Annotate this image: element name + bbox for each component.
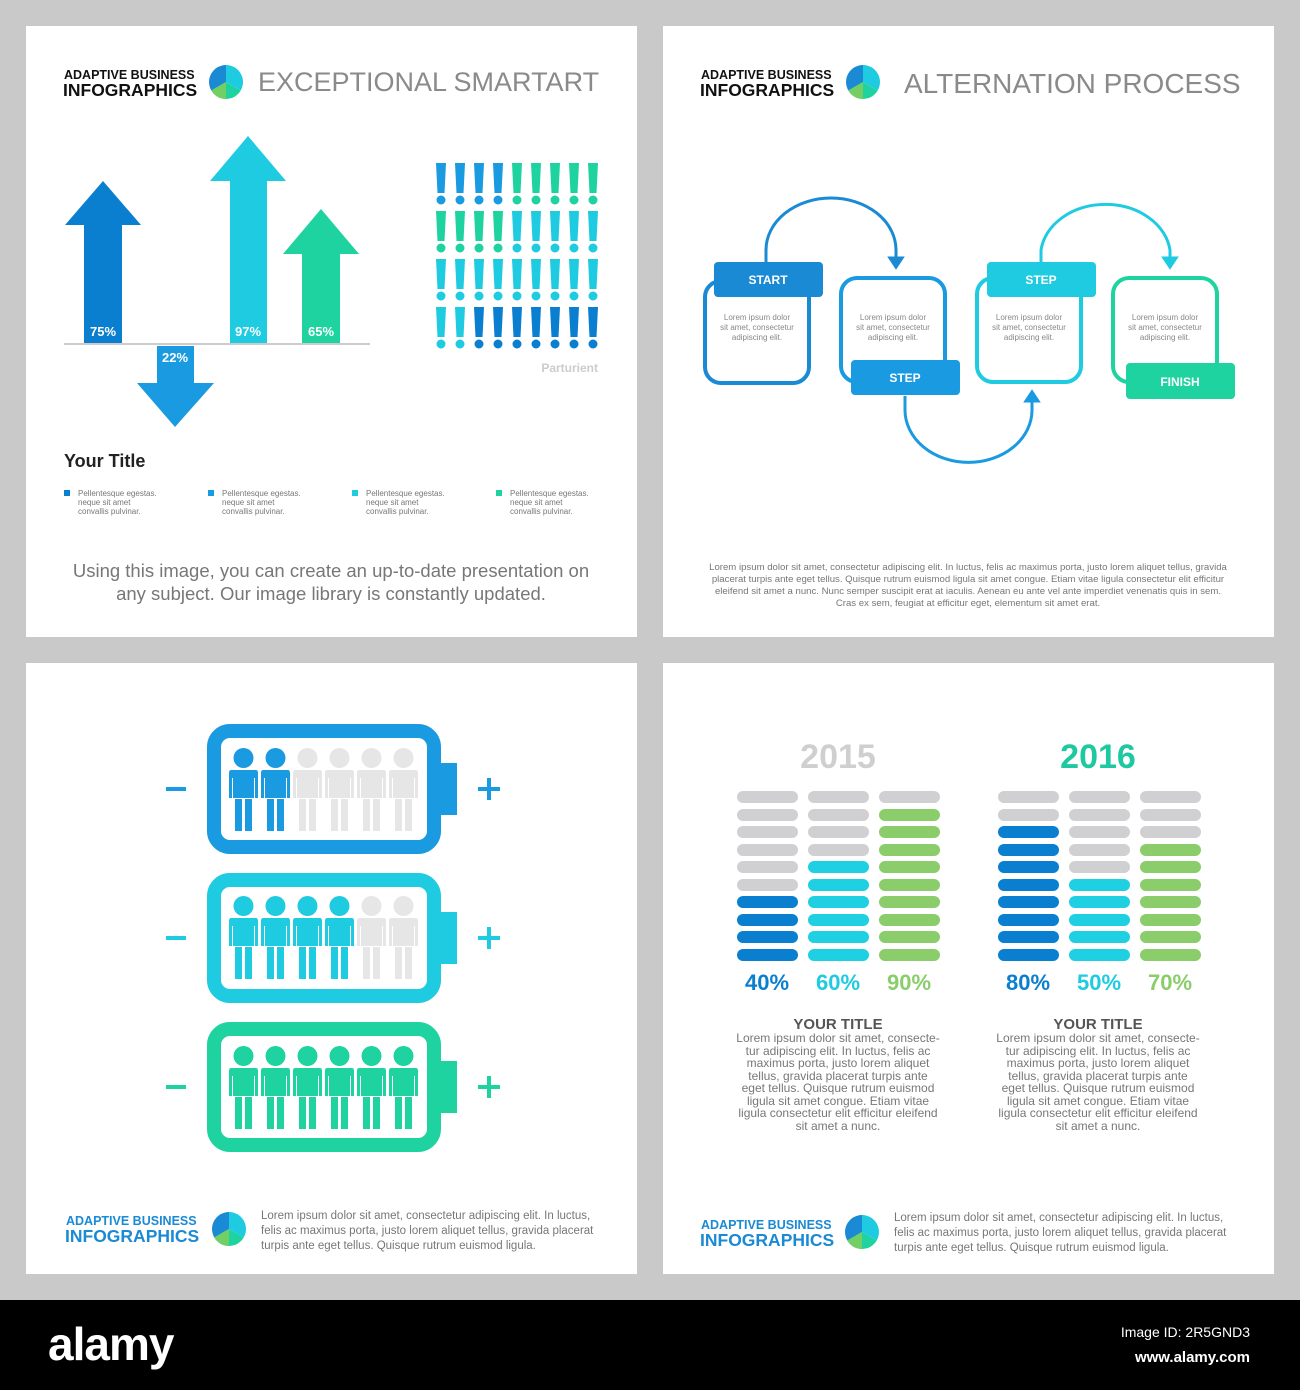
legend items: neque sit amet xyxy=(222,498,275,507)
step texts: adipiscing elit. xyxy=(1004,333,1054,342)
arcs xyxy=(766,198,1176,462)
exclamation grid xyxy=(436,163,598,348)
percentages xyxy=(745,970,1192,995)
text block 2015: ligula sit amet congue. Etiam vitae xyxy=(747,1094,929,1108)
step texts xyxy=(720,313,1202,342)
arrow 97% xyxy=(210,136,286,343)
paragraph xyxy=(709,562,1228,609)
percentages: 40% xyxy=(745,970,789,995)
step labels xyxy=(714,262,1235,399)
text block 2016: tellus, gravida placerat turpis ante xyxy=(1008,1069,1188,1083)
header logo xyxy=(700,65,880,100)
footer text xyxy=(73,560,589,604)
header logo: ADAPTIVE BUSINESS xyxy=(701,68,832,82)
title: EXCEPTIONAL SMARTART xyxy=(258,67,599,97)
paragraph: eleifend sit amet a nunc. Nunc semper suscipit erat at iaculis. Aenean eu ante vel ante imperdiet venenatis quis in sem. xyxy=(715,586,1221,597)
text block 2015: Lorem ipsum dolor sit amet, consecte- xyxy=(736,1031,940,1045)
legend items: neque sit amet xyxy=(510,498,563,507)
percentages: 70% xyxy=(1148,970,1192,995)
footer text: Lorem ipsum dolor sit amet, consectetur adipiscing elit. In luctus, xyxy=(261,1210,590,1222)
watermark bar: Image ID: 2R5GND3 xyxy=(1121,1324,1250,1340)
text block 2015 xyxy=(736,1016,940,1133)
footer logo: ADAPTIVE BUSINESS xyxy=(701,1218,832,1232)
step texts: adipiscing elit. xyxy=(868,333,918,342)
step labels: FINISH xyxy=(1160,375,1200,389)
title: ALTERNATION PROCESS xyxy=(904,68,1241,99)
legend items: convallis pulvinar. xyxy=(78,507,141,516)
footer text xyxy=(894,1212,1227,1254)
panel: bar comparison: 2016 xyxy=(1060,738,1136,776)
text block 2016 xyxy=(996,1016,1200,1133)
footer logo: INFOGRAPHICS xyxy=(700,1230,834,1250)
paragraph: Lorem ipsum dolor sit amet, consectetur adipiscing elit. In luctus, felis ac maximus porta, justo lorem aliquet tellus, gravida xyxy=(709,562,1228,573)
legend items: Pellentesque egestas. xyxy=(366,489,445,498)
watermark bar: www.alamy.com xyxy=(1134,1349,1250,1366)
text block 2016: tur adipiscing elit. In luctus, felis ac xyxy=(1006,1044,1190,1058)
panel: alternation process xyxy=(700,65,1241,609)
legend items: Pellentesque egestas. xyxy=(222,489,301,498)
panel: exceptional smartart xyxy=(63,65,599,604)
step texts: sit amet, consectetur xyxy=(720,323,794,332)
text block 2016: ligula sit amet congue. Etiam vitae xyxy=(1007,1094,1189,1108)
step texts: adipiscing elit. xyxy=(1140,333,1190,342)
text block 2015: tur adipiscing elit. In luctus, felis ac xyxy=(746,1044,930,1058)
text block 2016: Lorem ipsum dolor sit amet, consecte- xyxy=(996,1031,1200,1045)
year labels: 2015 xyxy=(800,738,876,776)
header logo xyxy=(63,65,243,100)
legend items: Pellentesque egestas. xyxy=(78,489,157,498)
text block 2015: YOUR TITLE xyxy=(793,1016,883,1033)
header logo: ADAPTIVE BUSINESS xyxy=(64,68,195,82)
battery 2 xyxy=(166,880,500,996)
footer text: turpis ante eget tellus. Quisque rutrum euismod ligula. xyxy=(894,1242,1169,1254)
paragraph: Cras ex sem, feugiat at efficitur eget, elementum sit amet erat. xyxy=(836,598,1100,609)
arrow 22% down xyxy=(137,346,214,427)
footer logo: INFOGRAPHICS xyxy=(65,1226,199,1246)
footer text: Lorem ipsum dolor sit amet, consectetur adipiscing elit. In luctus, xyxy=(894,1212,1223,1224)
step texts: sit amet, consectetur xyxy=(992,323,1066,332)
legend items: convallis pulvinar. xyxy=(366,507,429,516)
header logo: INFOGRAPHICS xyxy=(700,80,834,100)
step texts: sit amet, consectetur xyxy=(856,323,930,332)
step texts: Lorem ipsum dolor xyxy=(1132,313,1198,322)
your title: Your Title xyxy=(64,451,145,471)
footer logo: ADAPTIVE BUSINESS xyxy=(66,1214,197,1228)
arrow 65% xyxy=(283,209,359,343)
bars xyxy=(737,791,1201,961)
text block 2015: maximus porta, justo lorem aliquet xyxy=(747,1056,930,1070)
percentages: 60% xyxy=(816,970,860,995)
step texts: sit amet, consectetur xyxy=(1128,323,1202,332)
text block 2016: YOUR TITLE xyxy=(1053,1016,1143,1033)
panel: batteries xyxy=(65,731,594,1252)
text block 2015: eget tellus. Quisque rutrum euismod xyxy=(742,1081,934,1095)
baseline xyxy=(64,343,370,345)
footer text xyxy=(261,1210,594,1252)
text block 2016: ligula consectetur elit efficitur eleifend xyxy=(998,1106,1198,1120)
watermark bar: alamy xyxy=(48,1318,175,1370)
text block 2015: tellus, gravida placerat turpis ante xyxy=(748,1069,928,1083)
arrow 97%: 97% xyxy=(235,324,261,339)
legend items: neque sit amet xyxy=(366,498,419,507)
legend items: neque sit amet xyxy=(78,498,131,507)
percentages: 90% xyxy=(887,970,931,995)
footer text: any subject. Our image library is constantly updated. xyxy=(116,583,546,604)
legend items xyxy=(64,489,589,516)
footer text: Using this image, you can create an up-to-date presentation on xyxy=(73,560,589,581)
footer text: felis ac maximus porta, justo lorem aliquet tellus, gravida placerat xyxy=(261,1225,594,1237)
step texts: Lorem ipsum dolor xyxy=(860,313,926,322)
legend items: convallis pulvinar. xyxy=(222,507,285,516)
percentages: 50% xyxy=(1077,970,1121,995)
text block 2015: ligula consectetur elit efficitur eleifend xyxy=(738,1106,938,1120)
text block 2016: maximus porta, justo lorem aliquet xyxy=(1007,1056,1190,1070)
footer logo xyxy=(700,1215,879,1250)
footer logo xyxy=(65,1212,246,1246)
arrow 75%: 75% xyxy=(90,324,116,339)
text block 2016: eget tellus. Quisque rutrum euismod xyxy=(1002,1081,1194,1095)
step texts: Lorem ipsum dolor xyxy=(724,313,790,322)
step labels: STEP xyxy=(889,371,921,385)
battery 1 xyxy=(166,731,500,847)
percentages: 80% xyxy=(1006,970,1050,995)
header logo: INFOGRAPHICS xyxy=(63,80,197,100)
legend items: Pellentesque egestas. xyxy=(510,489,589,498)
text block 2015: sit amet a nunc. xyxy=(796,1119,880,1133)
arrow 75% xyxy=(65,181,141,343)
paragraph: placerat turpis ante eget tellus. Quisque rutrum euismod ligula sit amet congue. Etiam vitae ligula consectetur elit efficitur xyxy=(712,574,1225,585)
step labels: STEP xyxy=(1025,273,1057,287)
label parturient: Parturient xyxy=(541,361,598,375)
step labels: START xyxy=(748,273,788,287)
panel: bar comparison xyxy=(700,738,1227,1254)
step texts: Lorem ipsum dolor xyxy=(996,313,1062,322)
watermark bar xyxy=(0,1300,1300,1390)
arrow 65%: 65% xyxy=(308,324,334,339)
battery 3 xyxy=(166,1029,500,1145)
footer text: felis ac maximus porta, justo lorem aliquet tellus, gravida placerat xyxy=(894,1227,1227,1239)
step boxes xyxy=(705,278,1217,383)
arrow 22% down: 22% xyxy=(162,350,188,365)
step texts: adipiscing elit. xyxy=(732,333,782,342)
text block 2016: sit amet a nunc. xyxy=(1056,1119,1140,1133)
legend items: convallis pulvinar. xyxy=(510,507,573,516)
footer text: turpis ante eget tellus. Quisque rutrum euismod ligula. xyxy=(261,1240,536,1252)
